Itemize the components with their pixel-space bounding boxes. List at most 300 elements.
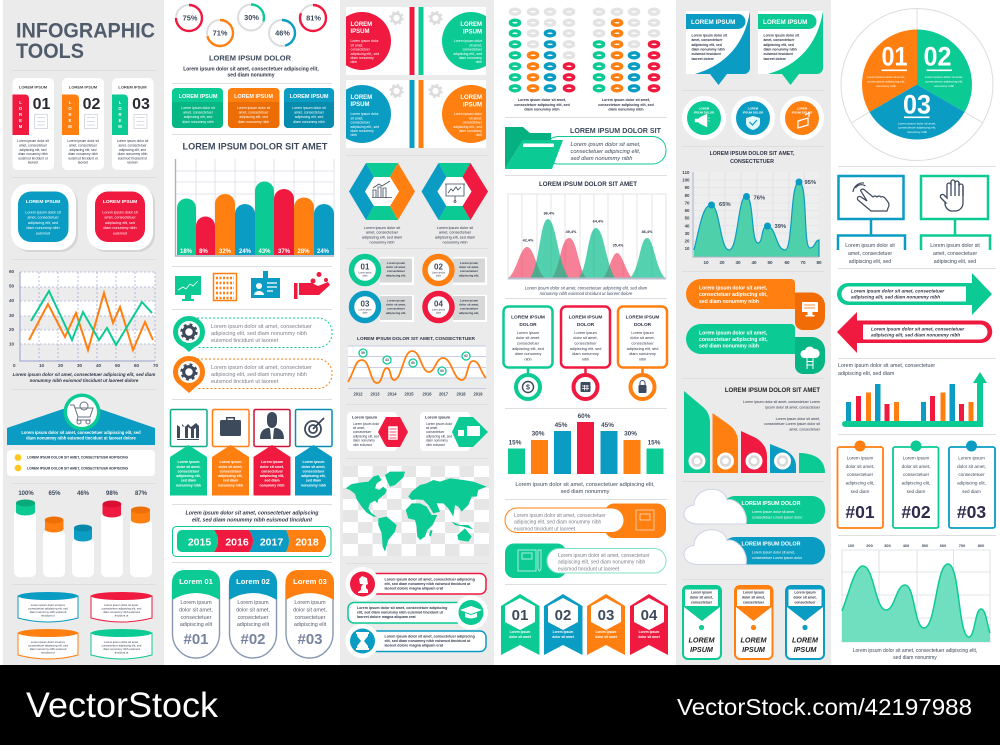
pill: notebook orange: euismod tincidunt ut laoreet bbox=[514, 526, 576, 532]
panel: circle and bar text pairs: LOREM bbox=[460, 22, 482, 28]
callout: green gear bbox=[176, 318, 332, 352]
panel: three numbered cards: E bbox=[69, 118, 72, 123]
pie chart 01 02 03: 03 bbox=[903, 90, 931, 120]
mountain chart bbox=[508, 181, 666, 296]
panel: hexagon cards: consectetuer bbox=[353, 430, 372, 434]
panel: #01 #02 #03 boxes: consectetuer bbox=[903, 472, 930, 477]
panel: three numbered cards: amet, consectetuer bbox=[69, 144, 98, 148]
panel: numbered rings: Lorem ipsum bbox=[387, 261, 406, 265]
heading: lorem ipsum dolor: Lorem ipsum dolor sit amet, consectetuer adipiscing elit, bbox=[183, 66, 319, 72]
panel: three numbered cards: O bbox=[19, 106, 23, 111]
mountain chart: LOREM IPSUM DOLOR SIT AMET bbox=[539, 181, 637, 188]
panel: three numbered cards: laoreet bbox=[127, 160, 138, 164]
panel: three numbered cards: O bbox=[118, 106, 122, 111]
panel: hexagon cards: sit amet, bbox=[353, 426, 365, 430]
panel: four icon cards: nonummy nibh bbox=[176, 484, 201, 488]
panel: speech tags: amet, consectetuer bbox=[692, 38, 723, 42]
panel: three numbered cards: amet, consectetuer bbox=[19, 144, 48, 148]
wave timeline chart: 2015 bbox=[404, 392, 414, 396]
pill: notebook orange: adipiscing elit, sed diam nonummy nibh bbox=[514, 520, 601, 526]
line chart: 20 bbox=[9, 327, 15, 332]
panel: framed boxes with icons: nibh bbox=[524, 356, 532, 362]
panel: three colour cards: diam nonummy nibh bbox=[238, 120, 269, 124]
panel: circle and bar text pairs: nibh bbox=[476, 133, 482, 137]
panel: framed boxes with icons: DOLOR bbox=[519, 322, 537, 328]
timeline 2015-2018: 2017 bbox=[260, 536, 283, 548]
panel: lorem cards 01-03: dolor sit amet, bbox=[179, 608, 213, 614]
mountain chart: 64,4% bbox=[593, 220, 604, 224]
panel: four icon cards: sed diam bbox=[181, 478, 196, 482]
panel: lorem cards 01-03: dolor sit amet, bbox=[293, 608, 327, 614]
panel: hexagon cards: diam nonummy bbox=[353, 438, 375, 442]
rounded bar chart: 32% bbox=[219, 249, 232, 255]
panel: descending shapes: LOREM IPSUM DOLOR SIT AMET bbox=[725, 388, 820, 394]
panel: hexagon diagrams: amet, consectetuer bbox=[439, 230, 472, 234]
area chart 100-800: Lorem ipsum dolor sit amet, consectetuer adipiscing elit, bbox=[853, 648, 977, 654]
panel: framed boxes with icons: dolor sit amet, bbox=[630, 335, 655, 340]
timeline 2015-2018: Lorem ipsum dolor sit amet, consectetuer adipiscing bbox=[185, 510, 319, 516]
panel: #01 #02 #03 boxes: Lorem ipsum bbox=[847, 456, 873, 460]
donut percentages: 71% bbox=[213, 28, 228, 38]
panel: four icon cards: dolor sit amet, bbox=[219, 465, 242, 469]
area chart with peaks: 30 bbox=[735, 260, 741, 265]
panel: three vertical tags: IPSUM bbox=[690, 645, 714, 654]
panel: hexagon cards: Lorem ipsum bbox=[352, 414, 378, 420]
panel: three vertical tags: consectetuer bbox=[691, 600, 713, 604]
panel: hexagon diagrams bbox=[349, 163, 488, 244]
panel: numbered rings: adipiscing elit, bbox=[386, 274, 406, 278]
panel: speech tags: euismod tincidunt bbox=[764, 52, 794, 56]
panel: three numbered cards: L bbox=[69, 100, 72, 105]
panel: four icon cards: adipiscing elit, bbox=[176, 474, 201, 478]
pill: notebook green: euismod tincidunt ut laoreet bbox=[558, 566, 620, 572]
panel: lorem cards 01-03: adipiscing elit bbox=[237, 622, 270, 628]
panel: four disc text blocks: Lorem ipsum dolor sit amet, bbox=[31, 603, 65, 607]
line chart: 10 bbox=[9, 342, 15, 346]
panel: numbered rings: 02 bbox=[434, 262, 443, 272]
panel: framed boxes with icons: diam nonummy bbox=[515, 351, 541, 356]
panel: ribbon badges 01-04: 04 bbox=[641, 607, 658, 624]
panel: four icon cards: dolor sit amet, bbox=[302, 465, 325, 469]
panel: three numbered cards: R bbox=[68, 112, 72, 117]
panel: three numbered cards: L bbox=[119, 100, 122, 105]
panel: lorem cards 01-03: #01 bbox=[183, 631, 209, 648]
mountain chart: 86,4% bbox=[544, 212, 555, 216]
panel: hexagon diagrams: nonummy nibh bbox=[370, 240, 394, 244]
panel: three numbered cards: M bbox=[118, 124, 122, 129]
panel: four icon cards: sed diam bbox=[264, 478, 280, 482]
panel: rounded square callouts: LOREM IPSUM bbox=[26, 199, 60, 205]
wave timeline chart: 2013 bbox=[370, 392, 380, 396]
panel: circle and bar text pairs: adipiscing elit,, sed bbox=[350, 125, 379, 129]
panel: numbered rings: consectetuer bbox=[460, 269, 479, 273]
donut percentages bbox=[176, 4, 326, 46]
panel: #01 #02 #03 boxes: adipiscing elit, bbox=[902, 480, 930, 486]
ring stack charts: diam nonummy nibh bbox=[608, 108, 644, 112]
panel: three vertical tags: LOREM bbox=[792, 636, 819, 644]
panel: hexagon diagrams: Lorem ipsum dolor sit bbox=[437, 226, 474, 230]
cylinder bar chart: 100% bbox=[18, 491, 34, 497]
panel: framed boxes with icons: Lorem ipsum bbox=[574, 330, 597, 335]
panel: circle and bar text pairs: IPSUM bbox=[463, 102, 482, 108]
panel: three numbered cards: amet, consectetuer bbox=[118, 144, 147, 148]
callout: orange gear bbox=[176, 358, 332, 393]
panel: four icon cards: consectetuer bbox=[261, 470, 284, 474]
panel: framed boxes with icons: dolor sit amet, bbox=[573, 335, 598, 340]
cylinder bar chart: 98% bbox=[106, 491, 119, 497]
panel: three vertical tags: IPSUM bbox=[794, 645, 817, 654]
panel: rounded square callouts: amet, consectetuer bbox=[104, 216, 136, 220]
panel: hexagon diagrams: Lorem ipsum dolor sit bbox=[364, 226, 401, 230]
arrow: green right: Lorem ipsum dolor sit amet, consectetuer bbox=[851, 288, 945, 294]
panel: #01 #02 #03 boxes: Lorem ipsum bbox=[958, 456, 985, 460]
panel: three colour cards: amet, consectetuer bbox=[239, 110, 269, 114]
panel: speech tags: LOREM IPSUM bbox=[691, 19, 735, 26]
panel: three numbered cards: 01 bbox=[33, 96, 50, 113]
panel: four icon cards: Lorem ipsum bbox=[303, 460, 324, 464]
area chart 100-800: sed diam nonummy bbox=[893, 655, 937, 661]
panel: circle and bar text pairs: sit amet, bbox=[469, 116, 482, 120]
area chart 100-800: 300 bbox=[884, 543, 891, 548]
panel: three numbered cards: R bbox=[118, 112, 122, 117]
panel: #01 #02 #03 boxes: sed diam bbox=[851, 489, 869, 494]
icon: id card bbox=[251, 271, 280, 298]
panel: speech tags: Lorem ipsum dolor sit bbox=[764, 34, 800, 38]
area chart with peaks: LOREM IPSUM DOLOR SIT AMET, bbox=[710, 151, 795, 157]
panel: three numbered cards: LOREM IPSUM bbox=[19, 84, 48, 90]
area chart with peaks: 70 bbox=[685, 200, 690, 206]
panel: four disc text blocks: Lorem ipsum dolor sit amet, bbox=[104, 640, 139, 644]
panel: four disc text blocks: Lorem ipsum dolor sit amet, bbox=[31, 640, 65, 644]
row: graduation green bbox=[348, 596, 488, 630]
panel: speech tags: Lorem ipsum dolor sit bbox=[692, 34, 728, 38]
panel: four icon cards: adipiscing elit, bbox=[218, 474, 243, 478]
panel: lorem cards 01-03: Lorem ipsum bbox=[294, 600, 326, 606]
panel: rounded square callouts: amet, consectetuer bbox=[27, 216, 59, 220]
panel: ribbon badges 01-04: Lorem ipsum bbox=[596, 630, 616, 634]
row: graduation green: Lorem ipsum dolor sit amet, consectetuer adipiscing bbox=[357, 606, 447, 610]
panel: circle and bar text pairs: diam nonummy bbox=[350, 56, 374, 60]
bar chart 15-60 percent: 30% bbox=[624, 430, 637, 438]
line chart: 40 bbox=[96, 363, 102, 368]
panel: four disc text blocks bbox=[18, 592, 152, 659]
line chart: 60 bbox=[9, 269, 15, 274]
panel: three numbered cards: adipiscing elit, sed bbox=[20, 148, 47, 152]
bar chart 15-60 percent: 60% bbox=[578, 413, 591, 420]
panel: circle and bar text pairs: LOREM bbox=[460, 95, 482, 101]
area chart with peaks: 110 bbox=[682, 170, 690, 175]
panel: numbered rings: Lorem ipsum bbox=[387, 298, 406, 302]
panel: speech tags: amet, consectetuer bbox=[764, 38, 795, 42]
panel: framed boxes with icons: nibh bbox=[582, 356, 589, 362]
footer band: VectorStock.com/42197988 bbox=[677, 694, 972, 720]
callout: orange presentation bbox=[686, 279, 825, 330]
panel: ribbon badges 01-04 bbox=[501, 594, 668, 655]
panel: hexagon diagrams: adipiscing elit, sed diam bbox=[435, 236, 475, 240]
bar chart with up arrow: Lorem ipsum dolor sit amet, consectetuer bbox=[838, 363, 935, 369]
panel: hexagon diagrams: adipiscing elit, sed diam bbox=[362, 236, 402, 240]
panel: three vertical tags: IPSUM bbox=[742, 645, 766, 654]
panel: lorem cards 01-03: adipiscing elit bbox=[180, 622, 213, 628]
callout: orange gear: euismod tincidunt ut laoreet bbox=[211, 379, 279, 385]
donut percentages: 81% bbox=[306, 14, 321, 22]
panel: four icon cards: Lorem ipsum bbox=[178, 460, 199, 464]
panel: cloud bars: Lorem ipsum dolor sit amet, bbox=[752, 510, 795, 514]
wave timeline chart: 2012 bbox=[353, 392, 363, 396]
panel: three colour cards: diam nonummy nibh bbox=[293, 120, 325, 124]
panel: #01 #02 #03 boxes: adipiscing elit, bbox=[957, 480, 986, 486]
panel: three numbered cards: euismod tincidunt ut bbox=[18, 156, 48, 160]
rounded bar chart bbox=[176, 159, 334, 256]
panel: circle and bar text pairs: consectetuer bbox=[350, 120, 371, 124]
panel: numbered rings: Lorem ipsum bbox=[432, 308, 445, 312]
panel: circle and bar text pairs: adipiscing elit,, sed bbox=[350, 52, 379, 56]
row: hourglass blue: laoreet dolore magna aliquam erat bbox=[384, 644, 444, 648]
panel: three numbered cards: laoreet bbox=[28, 160, 38, 164]
pie chart 01 02 03: consectetuer adipiscing elit, bbox=[867, 80, 905, 84]
panel: numbered rings: Lorem ipsum bbox=[432, 272, 445, 274]
panel: hexagon cards bbox=[347, 412, 488, 451]
panel: four icon cards: consectetuer bbox=[220, 470, 242, 474]
panel: framed boxes with icons: nibh bbox=[639, 356, 646, 362]
folder callout: consectetuer adipiscing elit, bbox=[570, 149, 640, 155]
line chart: 50 bbox=[9, 284, 15, 288]
panel: framed boxes with icons: consectetuer bbox=[517, 340, 540, 346]
area chart with peaks: 90 bbox=[685, 185, 690, 190]
panel: cloud bars: consectetuer Lorem ipsum dolor bbox=[752, 556, 803, 560]
panel: numbered rings: consectetuer bbox=[387, 306, 406, 310]
line chart: nonummy nibh euismod tincidunt ut laoreet dolore bbox=[30, 378, 139, 383]
panel: rounded square callouts: euismod bbox=[36, 232, 50, 236]
panel: numbered rings: adipiscing elit, bbox=[459, 311, 479, 315]
panel: three vertical tags: dolor sit amet, bbox=[690, 596, 713, 600]
panel: hexagon diagrams: nonummy nibh bbox=[443, 240, 467, 244]
panel: cloud bars bbox=[684, 489, 825, 564]
panel: ribbon badges 01-04: 03 bbox=[598, 607, 614, 624]
panel: rounded square callouts: LOREM IPSUM bbox=[103, 199, 137, 205]
panel: numbered rings: dolor sit amet, bbox=[386, 265, 406, 269]
panel: rounded square callouts: diam nonummy nibh bbox=[26, 226, 60, 230]
panel: speech tags: laoreet dolore bbox=[764, 57, 786, 61]
panel: hand gesture cards: amet, consectetuer bbox=[933, 251, 977, 257]
heading: lorem ipsum dolor: LOREM IPSUM DOLOR bbox=[209, 54, 292, 62]
panel: circle and bar text pairs: LOREM bbox=[350, 22, 372, 28]
panel: lorem cards 01-03: adipiscing elit bbox=[294, 622, 327, 628]
line chart: 20 bbox=[58, 363, 64, 368]
bar chart 15-60 percent: 15% bbox=[648, 440, 661, 446]
bar chart 15-60 percent: 15% bbox=[509, 440, 522, 446]
panel: four disc text blocks: diam nonummy nibh euismod bbox=[103, 610, 140, 614]
panel: circle and bar text pairs: IPSUM bbox=[463, 30, 482, 36]
panel: hand gesture cards: adipiscing elit, sed bbox=[849, 259, 891, 265]
panel: three numbered cards: 03 bbox=[132, 96, 150, 113]
panel: ribbon badges 01-04: dolor sit amet bbox=[638, 635, 661, 639]
panel: icon circles bbox=[682, 96, 824, 140]
area chart 100-800: 400 bbox=[903, 543, 909, 548]
panel: framed boxes with icons: diam nonummy bbox=[629, 351, 656, 356]
area chart with peaks: CONSECTETUER bbox=[730, 159, 774, 165]
area chart 100-800: 500 bbox=[922, 543, 928, 548]
panel: three numbered cards: E bbox=[19, 118, 22, 123]
panel: three numbered cards: euismod tincidunt ut bbox=[118, 156, 147, 160]
panel: numbered rings: consectetuer bbox=[387, 269, 406, 273]
panel: three numbered cards: diam nonummy nibh bbox=[18, 152, 48, 156]
row: hourglass blue: elit, sed diam nonummy nibh euismod tincidunt ut bbox=[384, 639, 471, 643]
callout: orange presentation: consectetuer adipiscing elit, bbox=[699, 292, 768, 298]
panel: circle and bar text pairs: consectetuer bbox=[463, 120, 483, 124]
panel: numbered rings: Lorem ipsum bbox=[358, 272, 372, 274]
pill: notebook orange bbox=[505, 504, 666, 538]
callout: green gear: euismod tincidunt ut laoreet bbox=[211, 338, 279, 344]
panel: rounded square callouts: adipiscing elit, sed bbox=[105, 221, 135, 225]
pie chart 01 02 03: nonummy nibh bbox=[876, 84, 896, 88]
panel: hand gesture cards bbox=[838, 176, 990, 265]
line chart: 40 bbox=[9, 298, 15, 303]
callout: orange gear: adipiscing elit, sed diam nonummy nibh bbox=[211, 372, 307, 378]
area chart with peaks: 60 bbox=[784, 260, 790, 265]
folder callout: sed diam nonummy nibh bbox=[570, 156, 632, 162]
panel: hand gesture cards: Lorem ipsum dolor sit bbox=[930, 243, 980, 249]
panel: rounded square callouts: diam nonummy nibh bbox=[103, 226, 137, 230]
panel: four icon cards: nonummy nibh bbox=[259, 484, 285, 488]
panel: three numbered cards: R bbox=[19, 112, 22, 117]
line chart: 70 bbox=[153, 363, 159, 368]
cylinder bar chart: 46% bbox=[77, 491, 90, 497]
panel: icon circles: LOREM bbox=[797, 106, 808, 110]
panel: #01 #02 #03 boxes: #02 bbox=[901, 502, 931, 522]
row: chess red bbox=[346, 567, 486, 601]
panel: three colour cards: Lorem ipsum dolor sit bbox=[292, 106, 326, 110]
area chart 100-800: 200 bbox=[866, 543, 873, 548]
panel: speech tags: laoreet dolore bbox=[692, 57, 714, 61]
panel: four disc text blocks: diam nonummy nibh euismod bbox=[30, 610, 67, 614]
panel: three numbered cards: Lorem ipsum dolor sit bbox=[67, 139, 99, 143]
panel: three numbered cards: diam nonummy nibh bbox=[68, 152, 98, 156]
panel: three numbered cards: M bbox=[19, 124, 23, 129]
row: graduation green: elit, sed diam nonummy nibh euismod tincidunt ut bbox=[357, 610, 444, 614]
panel: #01 #02 #03 boxes: consectetuer bbox=[847, 472, 874, 477]
panel: three vertical tags: dolor sit amet, bbox=[793, 596, 817, 600]
panel: three colour cards: amet, consectetuer bbox=[183, 110, 214, 114]
banner: shopping cart: Lorem ipsum dolor sit amet, consectetuer adipiscing elit, sed bbox=[21, 430, 141, 435]
icon: abacus bbox=[214, 274, 236, 300]
panel: three numbered cards: Lorem ipsum dolor sit bbox=[17, 139, 49, 143]
panel: four disc text blocks: tincidunt ut bbox=[115, 650, 128, 654]
bar chart with up arrow bbox=[838, 363, 987, 427]
panel: three colour cards: adipiscing elit, sed bbox=[184, 115, 212, 119]
callout: orange presentation: sed diam nonummy nibh bbox=[699, 299, 759, 305]
area chart 100-800 bbox=[842, 543, 990, 661]
panel: ribbon badges 01-04: Lorem ipsum bbox=[510, 630, 530, 634]
rounded bar chart: 37% bbox=[278, 249, 291, 255]
panel: lorem cards 01-03: #03 bbox=[297, 631, 323, 648]
panel: hexagon cards: sit amet, bbox=[426, 426, 438, 430]
area chart with peaks: 20 bbox=[685, 238, 690, 244]
mountain chart: 35,4% bbox=[613, 244, 624, 248]
panel: speech tags: LOREM IPSUM bbox=[763, 19, 807, 26]
panel: numbered rings: 01 bbox=[361, 262, 370, 272]
panel: speech tags: diam nonummy nibh bbox=[764, 48, 797, 52]
panel: rounded square callouts bbox=[11, 184, 155, 252]
panel: four disc text blocks: tincidunt ut bbox=[41, 650, 55, 654]
panel: three vertical tags: dolor sit amet, bbox=[742, 596, 765, 600]
panel: four icon cards: sed diam bbox=[223, 478, 238, 482]
arrow: red left bbox=[837, 312, 992, 353]
pie chart 01 02 03: consectetuer adipiscing elit, bbox=[925, 80, 963, 84]
ring stack charts: Lorem ipsum dolor sit amet, bbox=[518, 98, 566, 102]
panel: four icon cards: Lorem ipsum bbox=[220, 460, 241, 464]
panel: framed boxes with icons: Lorem ipsum bbox=[517, 330, 539, 335]
panel: numbered rings: 03 bbox=[361, 300, 370, 308]
timeline 2015-2018: 2018 bbox=[295, 536, 319, 548]
panel: four disc text blocks: consectetuer adipiscing elit, sed bbox=[102, 606, 142, 610]
panel: hexagon cards: Lorem ipsum dolor bbox=[426, 422, 453, 426]
panel: four icon cards: nonummy nibh bbox=[301, 484, 326, 488]
rounded bar chart: 24% bbox=[239, 249, 252, 255]
pill: notebook green bbox=[505, 544, 666, 578]
area chart 100-800: 800 bbox=[978, 543, 984, 548]
panel: four icon cards: dolor sit amet, bbox=[260, 465, 284, 469]
panel: icon circles: IPSUM DOLOR bbox=[743, 110, 764, 114]
panel: hexagon cards: Lorem ipsum dolor bbox=[353, 422, 380, 426]
panel: ribbon badges 01-04: 02 bbox=[555, 607, 571, 624]
panel: icon circles: LOREM bbox=[699, 106, 710, 110]
panel: framed boxes with icons: $ bbox=[526, 384, 530, 392]
panel: four disc text blocks: consectetuer adipiscing elit, sed bbox=[102, 644, 142, 648]
cylinder bar chart: 65% bbox=[48, 491, 61, 497]
wave timeline chart: 62 bbox=[464, 354, 468, 358]
panel: three vertical tags: Lorem ipsum bbox=[794, 590, 816, 594]
callout: green cloud: consectetuer adipiscing elit, bbox=[699, 337, 768, 343]
panel: framed boxes with icons: adipiscing elit, sed bbox=[512, 346, 544, 351]
title bbox=[16, 20, 155, 63]
area chart with peaks: 50 bbox=[767, 260, 773, 265]
panel: three vertical tags: Lorem ipsum bbox=[691, 590, 712, 594]
panel: icon circles: IPSUM DOLOR bbox=[792, 110, 813, 114]
panel: lorem cards 01-03: dolor sit amet, bbox=[236, 608, 270, 614]
row: chess red: laoreet dolore magna aliquam erat bbox=[384, 586, 444, 590]
area chart 100-800: 600 bbox=[940, 543, 946, 548]
ring stack charts: consectetuer adipiscing elit, sed bbox=[514, 103, 570, 107]
panel: three numbered cards: O bbox=[68, 106, 72, 111]
panel: three colour cards: amet, consectetuer bbox=[294, 110, 325, 114]
panel: circle and bar text pairs: sit amet, bbox=[469, 44, 482, 48]
panel: three numbered cards: LOREM IPSUM bbox=[69, 84, 98, 90]
panel: four disc text blocks: consectetuer adipiscing elit, sed bbox=[28, 606, 68, 610]
panel: hand gesture cards: adipiscing elit, sed bbox=[934, 259, 976, 265]
row: graduation green: laoreet dolore magna aliquam erat bbox=[357, 615, 416, 619]
panel: circle and bar text pairs: nibh bbox=[350, 133, 357, 137]
mountain chart: nonummy nibh euismod tincidunt ut laoreet dolore bbox=[540, 291, 633, 296]
panel: three colour cards: LOREM IPSUM bbox=[290, 94, 329, 100]
area chart 100-800: 700 bbox=[959, 543, 965, 548]
panel: descending shapes: consectetuer Lorem ipsum dolor sit bbox=[764, 422, 820, 426]
panel: framed boxes with icons: DOLOR bbox=[634, 322, 652, 328]
rounded bar chart: 18% bbox=[180, 249, 193, 255]
footer band bbox=[0, 665, 1000, 745]
panel: three numbered cards: E bbox=[119, 118, 122, 123]
pie chart 01 02 03: consectetuer adipiscing elit, bbox=[898, 126, 936, 130]
bar chart 15-60 percent: sed diam nonummy bbox=[561, 489, 610, 495]
panel: lorem cards 01-03: consectetuer bbox=[238, 615, 269, 621]
panel: three numbered cards: L bbox=[19, 100, 22, 105]
folder callout: Lorem ipsum dolor sit amet, bbox=[570, 142, 641, 148]
panel: framed boxes with icons: adipiscing elit, sed bbox=[570, 346, 601, 351]
panel: hexagon diagrams: amet, consectetuer bbox=[366, 230, 399, 234]
cylinder bar chart: 87% bbox=[135, 491, 148, 497]
pie chart 01 02 03: nonummy nibh bbox=[907, 130, 927, 134]
panel: #01 #02 #03 boxes: dolor sit amet, bbox=[902, 464, 930, 469]
